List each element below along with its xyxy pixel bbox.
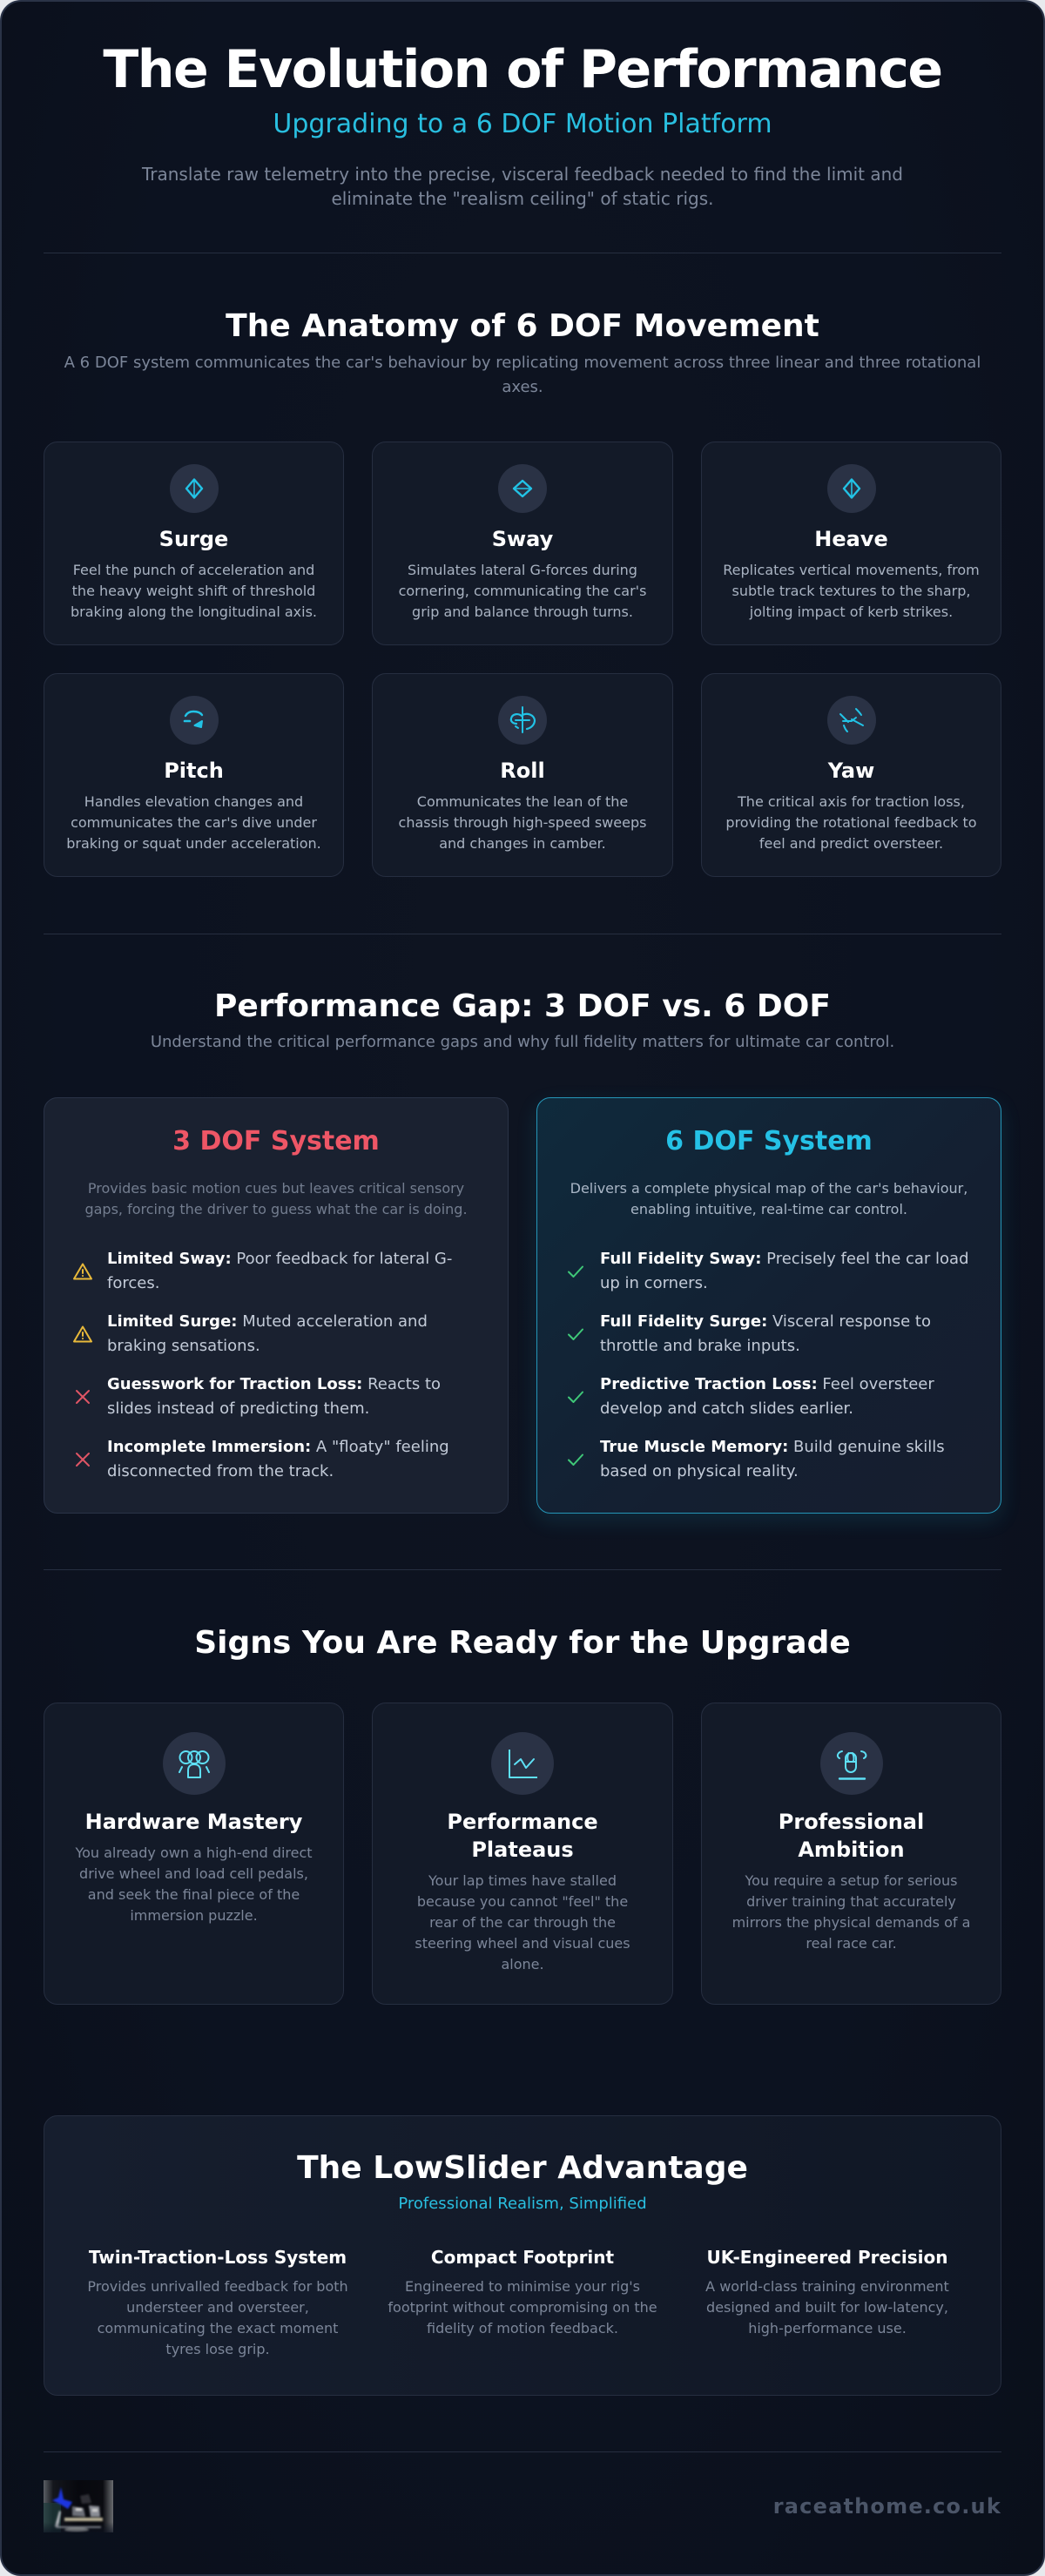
card: roll: Communicates the lean of the chassis through high-speed sweeps and changes in camber.	[399, 793, 646, 852]
feature: compact footprint: Engineered to minimise your rig's	[405, 2278, 640, 2295]
advantage heading: The LowSlider Advantage	[297, 2150, 748, 2186]
item: guesswork: Guesswork for Traction Loss: Reacts to slides instead of predicting them.	[107, 1375, 441, 1418]
card: heave: Replicates vertical movements, from subtle track textures to the sharp, jolting impact of kerb strikes.	[723, 562, 980, 620]
footer brand text: raceathome.co.uk	[773, 2494, 1001, 2519]
feature: twin traction loss	[87, 2247, 348, 2357]
subtitle: Upgrading to a 6 DOF Motion Platform	[273, 109, 772, 139]
card: professional ambition: You require a setup for serious driver training that accurately mirrors the physical demands of a real race car.	[732, 1872, 970, 1952]
icon: ambition	[820, 1732, 883, 1795]
card: hardware mastery: Hardware Mastery	[85, 1810, 302, 1834]
heading: performance gap: Performance Gap: 3 DOF vs. 6 DOF	[214, 988, 831, 1024]
feature: UK engineered	[705, 2247, 949, 2337]
feature: UK engineered: UK-Engineered Precision	[707, 2247, 947, 2268]
icon: hardware	[162, 1732, 225, 1795]
card: performance plateaus: Performance	[447, 1810, 598, 1834]
card: roll	[372, 673, 673, 877]
card: performance plateaus: because you cannot "feel" the	[417, 1893, 628, 1910]
panel: LowSlider advantage	[44, 2115, 1001, 2396]
card: surge: Surge	[159, 527, 228, 551]
panel: 6 DOF system: 6 DOF System	[665, 1126, 873, 1157]
card: pitch	[44, 673, 344, 877]
feature: UK engineered: high-performance use.	[748, 2320, 907, 2337]
performance gap description: Understand the critical performance gaps and why full fidelity matters for ultimate car control.	[151, 1033, 894, 1051]
anatomy section description: A 6 DOF system communicates the car's behaviour by replicating movement across three linear and three rotational	[64, 354, 981, 372]
panel: 3 DOF system: 3 DOF System	[172, 1126, 380, 1157]
feature: compact footprint: Compact Footprint	[431, 2247, 614, 2268]
feature: twin traction loss: tyres lose grip.	[165, 2341, 270, 2357]
card: yaw	[701, 673, 1001, 877]
item: full fidelity surge: Full Fidelity Surge: Visceral response to throttle and brake inputs.	[600, 1312, 931, 1355]
card: performance plateaus	[372, 1703, 673, 2005]
icon: pitch	[169, 696, 218, 745]
intro text: eliminate the "realism ceiling" of static rigs.	[331, 188, 714, 209]
feature: compact footprint	[388, 2247, 657, 2337]
card: yaw: Yaw	[828, 759, 874, 783]
intro text: Translate raw telemetry into the precise, visceral feedback needed to find the limit and	[142, 164, 903, 185]
item: incomplete immersion: Incomplete Immersion: A "floaty" feeling disconnected from the track.	[107, 1438, 449, 1480]
feature: UK engineered: A world-class training environment designed and built for low-latency,	[705, 2278, 949, 2316]
card: surge	[44, 442, 344, 645]
item: full fidelity sway: Full Fidelity Sway: Precisely feel the car load up in corners.	[600, 1250, 969, 1292]
card: surge: Feel the punch of acceleration and the heavy weight shift of threshold braking along the longitudinal axis.	[71, 562, 317, 620]
heading: anatomy section: The Anatomy of 6 DOF Movement	[226, 308, 819, 344]
panel: 6 DOF system	[536, 1097, 1001, 1514]
card: performance plateaus: rear of the car through the	[429, 1914, 616, 1931]
card: performance plateaus: alone.	[501, 1956, 544, 1972]
feature: twin traction loss: Provides unrivalled feedback for both understeer and oversteer, communicating the exact moment	[87, 2278, 348, 2337]
card: performance plateaus: Plateaus	[471, 1838, 574, 1862]
card: heave	[701, 442, 1001, 645]
item: true muscle memory: True Muscle Memory: Build genuine skills based on physical reality.	[600, 1438, 945, 1480]
icon: heave	[827, 464, 876, 513]
card: hardware mastery	[44, 1703, 344, 2005]
card: sway	[372, 442, 673, 645]
feature: compact footprint: footprint without compromising on the fidelity of motion feedback.	[388, 2299, 657, 2337]
card: sway: Simulates lateral G-forces during cornering, communicating the car's grip and balance through turns.	[399, 562, 646, 620]
anatomy section description: axes.	[502, 378, 543, 396]
card: professional ambition: Professional	[779, 1810, 924, 1834]
intro text	[141, 164, 903, 209]
anatomy section description	[64, 354, 981, 396]
card: yaw: The critical axis for traction loss, providing the rotational feedback to feel and predict oversteer.	[725, 793, 977, 852]
card: sway: Sway	[492, 527, 553, 551]
card: performance plateaus: Your lap times have stalled	[428, 1872, 617, 1889]
card: pitch: Handles elevation changes and communicates the car's dive under braking or squat under acceleration.	[66, 793, 321, 852]
title: The Evolution of Performance	[103, 39, 942, 100]
panel: 6 DOF system: Delivers a complete physical map of the car's behaviour, enabling intuitive, real-time car control.	[570, 1180, 967, 1217]
footer logo image	[44, 2480, 113, 2532]
card: heave: Heave	[814, 527, 888, 551]
card: professional ambition: Ambition	[798, 1838, 905, 1862]
card: roll: Roll	[500, 759, 545, 783]
heading: signs: Signs You Are Ready for the Upgrade	[194, 1625, 851, 1661]
icon: yaw	[827, 696, 876, 745]
item: predictive traction loss: Predictive Traction Loss: Feel oversteer develop and catch slides earlier.	[600, 1375, 934, 1418]
card: performance plateaus: steering wheel and visual cues	[415, 1935, 630, 1952]
item: limited surge: Limited Surge: Muted acceleration and braking sensations.	[107, 1312, 428, 1355]
card: pitch: Pitch	[164, 759, 224, 783]
panel: 3 DOF system	[44, 1097, 509, 1514]
feature: twin traction loss: Twin-Traction-Loss System	[89, 2247, 347, 2268]
icon: surge	[169, 464, 218, 513]
panel: 3 DOF system: Provides basic motion cues but leaves critical sensory gaps, forcing the driver to guess what the car is doing.	[84, 1180, 468, 1217]
item: limited sway: Limited Sway: Poor feedback for lateral G-forces.	[107, 1250, 452, 1292]
card: hardware mastery: You already own a high-end direct drive wheel and load cell pedals, and seek the final piece of the immersion puzzle.	[75, 1844, 313, 1924]
icon: sway	[498, 464, 547, 513]
card: professional ambition	[701, 1703, 1001, 2005]
advantage subtitle: Professional Realism, Simplified	[398, 2195, 647, 2213]
icon: performance chart	[491, 1732, 554, 1795]
icon: roll	[498, 696, 547, 745]
